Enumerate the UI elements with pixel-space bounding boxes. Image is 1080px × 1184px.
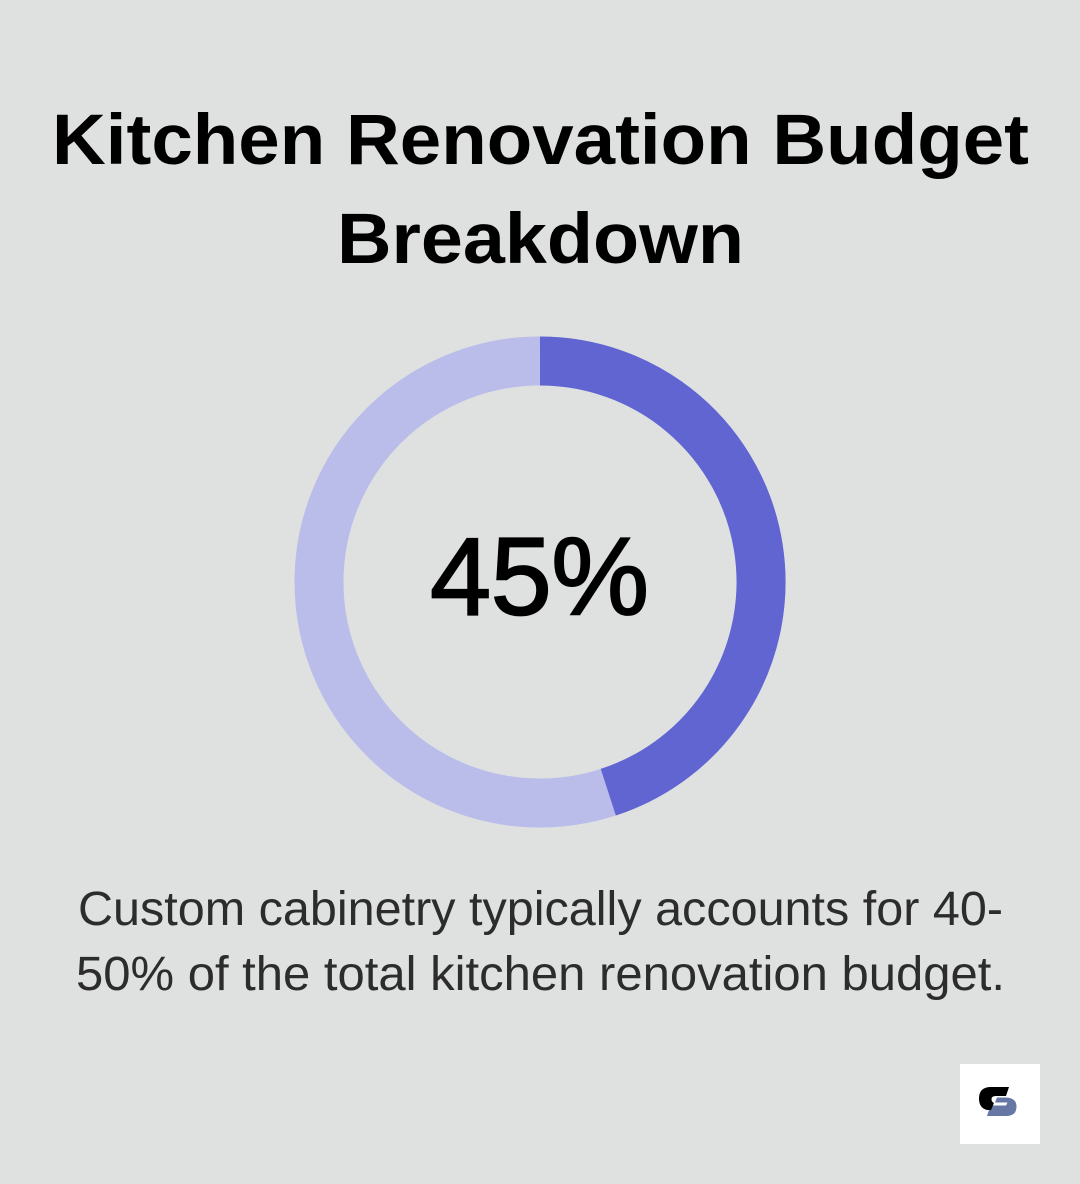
logo badge — [960, 1064, 1040, 1144]
logo mark: blue part — [987, 1098, 1016, 1116]
logo mark: black part — [979, 1087, 1009, 1110]
title: Breakdown — [337, 199, 744, 279]
description text: Custom cabinetry typically accounts for 40- — [78, 883, 1003, 936]
donut track — [319, 361, 761, 803]
title — [52, 100, 1029, 279]
center percentage: 45% — [430, 516, 649, 638]
donut value arc — [540, 361, 761, 792]
title: Kitchen Renovation Budget — [52, 100, 1029, 180]
description text: 50% of the total kitchen renovation budget. — [76, 948, 1005, 1001]
description text — [76, 883, 1005, 1001]
donut chart: 45% — [319, 361, 761, 803]
logo background — [960, 1064, 1040, 1144]
